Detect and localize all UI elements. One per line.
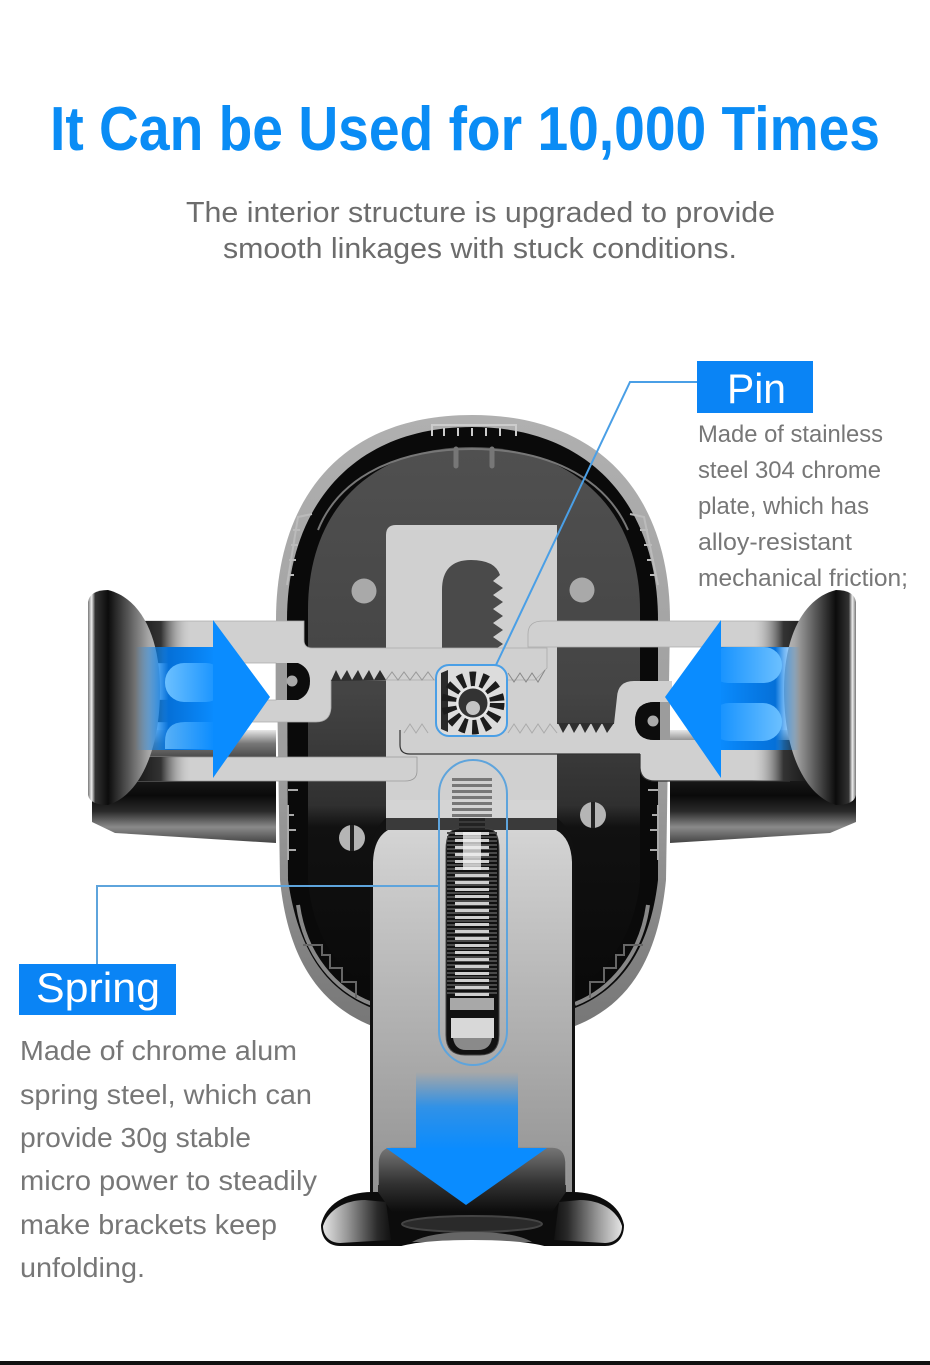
- label: Spring: Spring: [36, 964, 160, 1011]
- suction base feet: [321, 1147, 624, 1247]
- holder shell: [276, 415, 670, 1026]
- text block: Spring description: unfolding.: [20, 1252, 145, 1283]
- right clamp: [752, 590, 856, 805]
- text block: Pin description: plate, which has: [698, 493, 869, 520]
- left gripper arm lower: [130, 757, 417, 781]
- subtitle: The interior structure is upgraded to provide: [186, 197, 775, 229]
- stem: [370, 800, 575, 1195]
- text block: Pin description: [698, 421, 908, 592]
- rack teeth: [331, 670, 614, 733]
- label: Pin: Pin: [727, 365, 786, 412]
- plate rack outlines: [386, 670, 557, 733]
- pin gear: [437, 666, 506, 735]
- right gripper arm upper: [528, 621, 815, 647]
- label: Pin: [697, 361, 813, 413]
- central metal plate: [386, 525, 557, 825]
- left clamp: [88, 590, 192, 805]
- callout line: pin: [436, 382, 697, 736]
- text block: Spring description: spring steel, which can: [20, 1079, 312, 1110]
- text block: Spring description: make brackets keep: [20, 1209, 277, 1240]
- spring: [446, 778, 499, 1055]
- arrow: downward: [386, 1072, 547, 1205]
- text block: Spring description: micro power to steadily: [20, 1165, 317, 1196]
- callout line: spring: [97, 760, 507, 1065]
- subtitle: [186, 197, 775, 265]
- text block: Spring description: [20, 1035, 317, 1283]
- bottom bar: [0, 1361, 930, 1365]
- right gripper arm lower: [400, 681, 815, 781]
- screws: [339, 578, 606, 851]
- text block: Spring description: provide 30g stable: [20, 1122, 251, 1153]
- text block: Pin description: alloy-resistant: [698, 529, 852, 556]
- text block: Spring description: Made of chrome alum: [20, 1035, 297, 1066]
- text block: Pin description: Made of stainless: [698, 421, 883, 448]
- subtitle: smooth linkages with stuck conditions.: [223, 233, 737, 265]
- text block: Pin description: steel 304 chrome: [698, 457, 881, 484]
- text block: Pin description: mechanical friction;: [698, 565, 908, 592]
- product illustration: car phone holder cutaway: [88, 415, 856, 1247]
- arrow: right inward: [665, 620, 800, 778]
- arrow: left inward: [135, 620, 270, 778]
- left gripper arm upper: [130, 621, 547, 722]
- holder underside arms: [92, 730, 856, 843]
